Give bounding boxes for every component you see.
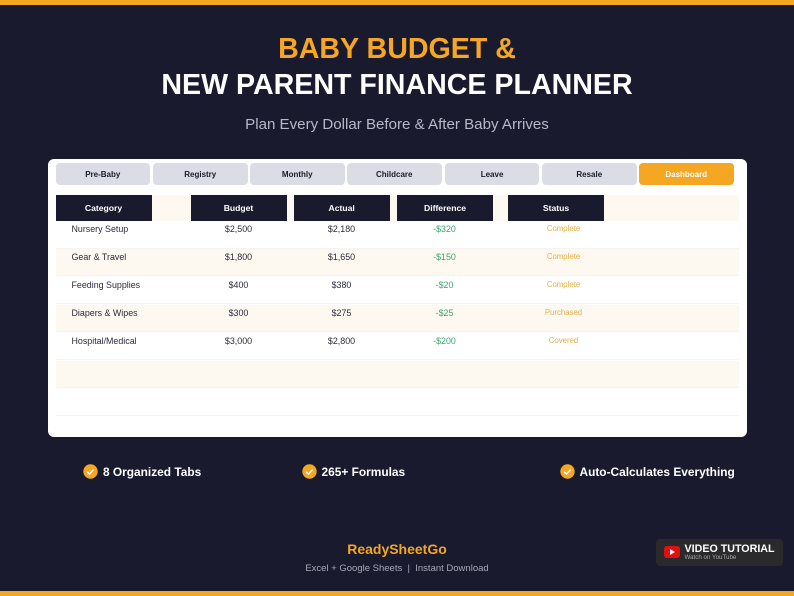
row: Gear & Travel: $1,800 — [225, 252, 252, 262]
tab: Childcare — [347, 163, 442, 185]
row: Hospital/Medical: -$200 — [433, 336, 456, 346]
tab: Leave — [445, 163, 539, 185]
row: Gear & Travel: Complete — [547, 252, 580, 261]
tab: Monthly: Monthly — [282, 170, 313, 179]
header: Status — [508, 194, 604, 220]
row: Hospital/Medical: Covered — [549, 336, 578, 344]
row: Nursery Setup — [56, 221, 739, 248]
row: Diapers & Wipes: Diapers & Wipes — [72, 308, 138, 318]
row: Feeding Supplies: $380 — [332, 280, 351, 290]
feature: 265+ Formulas: 265+ Formulas — [322, 465, 405, 479]
row: Hospital/Medical: Hospital/Medical — [72, 336, 137, 346]
row: Diapers & Wipes: Purchased — [545, 308, 582, 316]
row: Nursery Setup: $2,500 — [225, 224, 252, 234]
tab: Pre-Baby — [56, 163, 150, 185]
row: Nursery Setup: Nursery Setup — [72, 224, 128, 234]
icon: YouTube play — [664, 546, 680, 558]
bottom accent bar — [0, 591, 794, 596]
row: Feeding Supplies: -$20 — [436, 280, 453, 290]
brand name: ReadySheetGo — [347, 541, 447, 557]
row: Feeding Supplies: Feeding Supplies — [72, 280, 140, 290]
row: Gear & Travel: $1,650 — [328, 252, 355, 262]
feature: 8 Organized Tabs: 8 Organized Tabs — [103, 465, 201, 479]
row: Feeding Supplies: Complete — [547, 280, 580, 289]
title line 1: BABY BUDGET & — [278, 33, 516, 65]
header: Budget: Budget — [224, 202, 253, 212]
tab: Pre-Baby: Pre-Baby — [85, 170, 120, 179]
top accent bar — [0, 0, 794, 5]
empty row 6 — [56, 360, 739, 388]
badge subtext: Watch on YouTube — [684, 554, 736, 561]
row: Gear & Travel — [56, 248, 739, 276]
header: Actual — [294, 194, 390, 220]
tab: Dashboard (active): Dashboard — [665, 170, 707, 179]
row: Hospital/Medical: $3,000 — [225, 336, 252, 346]
row: Hospital/Medical — [56, 332, 739, 360]
tab: Dashboard (active) — [639, 163, 734, 185]
row: Diapers & Wipes: $275 — [332, 308, 351, 318]
header: Category — [56, 194, 152, 220]
row: Diapers & Wipes — [56, 304, 739, 332]
tab: Resale — [542, 163, 636, 185]
row: Gear & Travel: -$150 — [433, 252, 456, 262]
row: Nursery Setup: Complete — [547, 224, 580, 233]
tab: Leave: Leave — [481, 170, 503, 179]
subtitle: Plan Every Dollar Before & After Baby Arrives — [245, 116, 549, 133]
row: Nursery Setup: -$320 — [433, 224, 456, 234]
row: Feeding Supplies — [56, 276, 739, 304]
tab: Registry: Registry — [184, 170, 216, 179]
header: Category: Category — [85, 202, 122, 212]
feature: Auto-Calculates Everything: Auto-Calculates Everything — [580, 465, 735, 479]
header: Budget — [190, 194, 286, 220]
header: Status: Status — [543, 202, 569, 212]
row: Feeding Supplies: $400 — [229, 280, 248, 290]
row: Diapers & Wipes: $300 — [229, 308, 248, 318]
row: Nursery Setup: $2,180 — [328, 224, 355, 234]
row: Diapers & Wipes: -$25 — [436, 308, 453, 318]
tab: Monthly — [250, 163, 344, 185]
header: Difference — [397, 194, 493, 220]
tab: Childcare: Childcare — [376, 170, 412, 179]
panel: spreadsheet card — [48, 159, 747, 437]
video tutorial badge — [656, 539, 783, 566]
tab: Resale: Resale — [576, 170, 602, 179]
header: Actual: Actual — [329, 202, 355, 212]
table header band — [56, 194, 739, 220]
header: Difference: Difference — [424, 202, 466, 212]
title line 2: NEW PARENT FINANCE PLANNER — [161, 69, 633, 101]
row: Hospital/Medical: $2,800 — [328, 336, 355, 346]
empty row 7 — [56, 388, 739, 416]
badge heading: VIDEO TUTORIAL — [684, 542, 775, 554]
footer tagline: Excel + Google Sheets | Instant Download — [305, 563, 489, 574]
row: Gear & Travel: Gear & Travel — [72, 252, 126, 262]
tab: Registry — [153, 163, 248, 185]
